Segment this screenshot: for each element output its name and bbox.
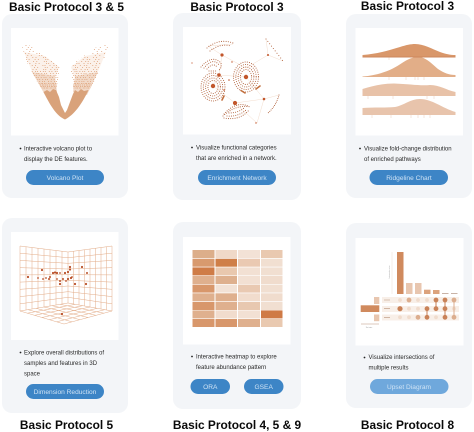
- bullet text: [20, 146, 93, 163]
- panel: volcano plot: [2, 14, 128, 198]
- bullet text: Explore overall distributions of: [24, 350, 104, 356]
- bullet text: feature abundance pattern: [196, 365, 266, 371]
- button: Enrichment Network: Enrichment Network: [207, 175, 267, 182]
- bullet text: that are enriched in a network.: [196, 156, 277, 162]
- button: Volcano Plot: [26, 170, 104, 185]
- button: Ridgeline Chart: Ridgeline Chart: [386, 175, 432, 182]
- button: Upset Diagram: [370, 379, 448, 394]
- button: Enrichment Network: [198, 170, 276, 185]
- title: volcano: Basic Protocol 3 & 5: [9, 0, 124, 14]
- button: Dimension Reduction: Dimension Reduction: [34, 389, 97, 396]
- bullet text: [20, 350, 104, 378]
- bullet text: Visualize functional categories: [196, 146, 277, 152]
- title: network: Basic Protocol 3: [190, 0, 284, 14]
- panel: enrichment network: [173, 13, 301, 200]
- chart: upset: Set size: [366, 326, 372, 329]
- bullet text: Interactive volcano plot to: [24, 146, 93, 152]
- title: upset: Basic Protocol 8: [361, 418, 454, 432]
- chart: upset: [361, 252, 459, 329]
- bullet text: [359, 146, 452, 163]
- panel: ridgeline chart: [346, 14, 472, 198]
- chart: 3D scatter: [20, 246, 112, 324]
- button: Volcano Plot: Volcano Plot: [47, 175, 83, 182]
- bullet text: space: [24, 372, 41, 378]
- chart: heatmap: [192, 250, 282, 327]
- bullet text: display the DE features.: [24, 157, 88, 163]
- bullet text: samples and features in 3D: [24, 361, 98, 367]
- title: dimension reduction: Basic Protocol 5: [20, 418, 113, 432]
- button: Dimension Reduction: [26, 384, 104, 399]
- bullet text: of enriched pathways: [364, 157, 421, 163]
- bullet text: Visualize intersections of: [368, 355, 435, 361]
- chart: ridgeline: [362, 44, 456, 118]
- panel: heatmap: [173, 222, 301, 409]
- bullet text: Visualize fold-change distribution: [364, 146, 452, 152]
- title: heatmap: Basic Protocol 4, 5 & 9: [173, 418, 301, 432]
- panel: 3D dimension reduction: [2, 218, 128, 413]
- button: Upset Diagram: Upset Diagram: [387, 384, 431, 391]
- button: ORA: [190, 379, 230, 394]
- button: GSEA: GSEA: [255, 384, 273, 391]
- button: ORA: ORA: [203, 384, 218, 391]
- bullet text: Interactive heatmap to explore: [196, 354, 277, 360]
- bullet text: multiple results: [368, 366, 409, 372]
- chart: network: [191, 39, 283, 124]
- button: Ridgeline Chart: [370, 170, 448, 185]
- chart: volcano scatter: [19, 46, 112, 120]
- panel: upset diagram: [346, 223, 472, 408]
- button: GSEA: [244, 379, 284, 394]
- bullet text: [191, 354, 277, 371]
- bullet text: [191, 146, 277, 162]
- bullet text: [364, 355, 435, 372]
- chart: upset: Intersection size: [388, 266, 391, 278]
